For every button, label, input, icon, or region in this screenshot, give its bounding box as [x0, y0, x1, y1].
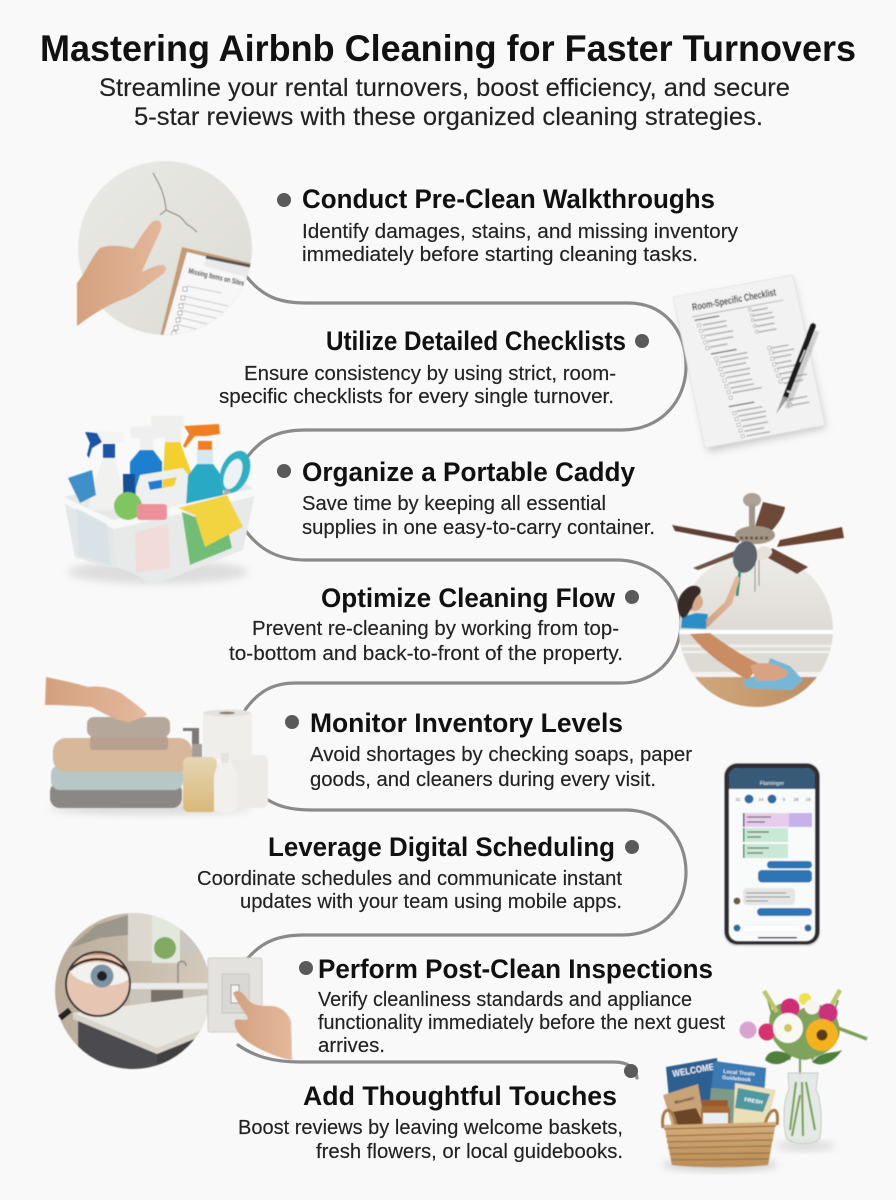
calendar dates: 28	[793, 797, 799, 802]
green cloth	[182, 512, 232, 565]
body text: Ensure consistency by using strict, room-	[244, 363, 616, 385]
local guidebook	[708, 1061, 766, 1125]
teal spray bottle with orange trigger	[183, 424, 223, 505]
snack box: FRESH	[744, 1097, 763, 1106]
step: Organize a Portable Caddy	[277, 457, 655, 539]
illustration: cleaning caddy	[63, 416, 256, 585]
local guidebook: Local Treats	[723, 1069, 755, 1078]
pink sponge	[137, 504, 167, 520]
local guidebook: Guidebook	[722, 1075, 752, 1084]
bullet	[624, 1064, 638, 1078]
step: Utilize Detailed Checklists	[219, 326, 649, 408]
step: Perform Post-Clean Inspections	[299, 954, 725, 1057]
left spray bottle	[85, 431, 124, 510]
arm wiping with cloth	[690, 633, 803, 690]
body text: Verify cleanliness standards and appliance	[318, 989, 692, 1011]
app header	[729, 768, 815, 789]
caddy body	[63, 488, 256, 585]
body text	[238, 1117, 623, 1163]
hand on towels	[45, 677, 147, 722]
soap dispenser	[183, 728, 217, 812]
heading: Monitor Inventory Levels	[310, 708, 623, 738]
chat bubbles	[734, 861, 812, 916]
subtitle: 5-star reviews with these organized cleaning strategies.	[134, 103, 763, 131]
room circle	[679, 553, 833, 709]
folded towels	[50, 717, 192, 808]
clipboard	[160, 246, 252, 336]
blossoms	[740, 993, 838, 1051]
body text	[310, 744, 692, 791]
body text: to-bottom and back-to-front of the property.	[229, 643, 623, 665]
toilet paper rolls	[203, 710, 268, 808]
yellow spray bottle	[151, 416, 194, 495]
body text	[229, 618, 623, 665]
blue sponge	[68, 470, 96, 503]
bullet	[277, 464, 291, 478]
step: Monitor Inventory Levels	[285, 708, 692, 791]
magnifying glass with eye	[60, 952, 130, 1018]
heading: Add Thoughtful Touches	[303, 1081, 617, 1111]
body text	[302, 221, 738, 266]
body text: supplies in one easy-to-carry container.	[302, 517, 655, 539]
pen	[776, 326, 817, 414]
heading: Optimize Cleaning Flow	[321, 583, 616, 613]
heading: Perform Post-Clean Inspections	[318, 954, 713, 984]
checklist contents: Room-Specific Checklist	[691, 287, 777, 314]
hand pressing switch	[233, 991, 292, 1060]
bullet	[277, 193, 291, 207]
body text	[219, 363, 616, 408]
body text: updates with your team using mobile apps.	[240, 891, 622, 913]
heading: Organize a Portable Caddy	[302, 457, 635, 487]
heading: Utilize Detailed Checklists	[326, 326, 626, 356]
bullet	[625, 840, 639, 854]
calendar dates: 8	[783, 797, 786, 802]
heading: Conduct Pre-Clean Walkthroughs	[302, 184, 715, 214]
yellow cloth	[178, 495, 243, 547]
lotion bottle	[214, 753, 237, 812]
leaves and stems	[764, 990, 867, 1075]
subtitle: Streamline your rental turnovers, boost efficiency, and secure	[99, 74, 790, 102]
blue spray bottle	[123, 425, 168, 495]
bullet	[625, 590, 639, 604]
illustration: wall crack inspection	[77, 161, 254, 345]
message input	[734, 924, 812, 938]
body text	[318, 989, 725, 1057]
body text: Coordinate schedules and communicate instant	[197, 868, 622, 890]
schedule events	[743, 813, 812, 858]
illustration: ceiling fan and top-to-bottom cleaning	[672, 493, 844, 709]
illustration: room-specific checklist with pen	[673, 275, 826, 452]
glass vase	[784, 1073, 821, 1144]
calendar dates: 19	[805, 797, 811, 802]
body text	[302, 493, 655, 539]
illustration: towels and supplies	[45, 677, 268, 815]
illustration: kitchen inspection	[53, 911, 292, 1075]
heading: Leverage Digital Scheduling	[268, 832, 615, 862]
body text: Save time by keeping all essential	[302, 493, 606, 515]
jar	[701, 1100, 730, 1130]
checklist contents	[689, 285, 816, 443]
body text: goods, and cleaners during every visit.	[310, 769, 656, 791]
clipboard: Missing Items on Sites	[188, 266, 245, 288]
step: Conduct Pre-Clean Walkthroughs	[277, 184, 738, 266]
caddy handle	[135, 468, 188, 510]
duster	[730, 539, 760, 596]
caddy back	[64, 478, 255, 525]
coffee bag: Mountain	[674, 1095, 695, 1105]
light switch	[208, 958, 262, 1032]
body text	[197, 868, 622, 913]
ceiling fan	[672, 493, 844, 592]
subtitle	[99, 74, 790, 131]
connector path	[238, 276, 686, 1078]
woman dusting	[678, 576, 740, 629]
pointing hand	[77, 220, 166, 326]
green scrubber	[114, 492, 142, 520]
body text: Identify damages, stains, and missing inventory	[302, 221, 738, 243]
bullet	[635, 334, 649, 348]
illustration: welcome basket	[662, 1058, 778, 1171]
body text: specific checklists for every single turnover.	[219, 386, 614, 408]
bullet	[285, 715, 299, 729]
step: Optimize Cleaning Flow	[229, 583, 639, 665]
vase stems	[790, 1082, 815, 1136]
body text: Boost reviews by leaving welcome baskets,	[238, 1117, 623, 1139]
body text: Avoid shortages by checking soaps, paper	[310, 744, 692, 766]
illustration: flowers in vase	[740, 990, 867, 1151]
title: Mastering Airbnb Cleaning for Faster Turnovers	[40, 28, 856, 69]
body text: fresh flowers, or local guidebooks.	[316, 1141, 623, 1163]
illustration: smartphone scheduling app	[724, 763, 820, 946]
step: Add Thoughtful Touches	[238, 1064, 638, 1163]
calendar dates: 31	[735, 797, 741, 802]
app header: Flaminger	[760, 781, 784, 787]
body text: functionality immediately before the next guest	[318, 1012, 725, 1034]
calendar dates	[735, 794, 811, 804]
body text: Prevent re-cleaning by working from top-	[252, 618, 619, 640]
calendar dates: 24	[758, 797, 764, 802]
step: Leverage Digital Scheduling	[197, 832, 639, 913]
kitchen circle	[53, 911, 213, 1075]
welcome guidebook: WELCOME	[672, 1062, 715, 1080]
body text: immediately before starting cleaning tasks.	[302, 244, 698, 266]
wall crack	[153, 173, 197, 232]
scrub brush	[214, 446, 256, 498]
body text: arrives.	[318, 1035, 385, 1057]
wicker basket	[663, 1110, 777, 1167]
bullet	[299, 961, 313, 975]
